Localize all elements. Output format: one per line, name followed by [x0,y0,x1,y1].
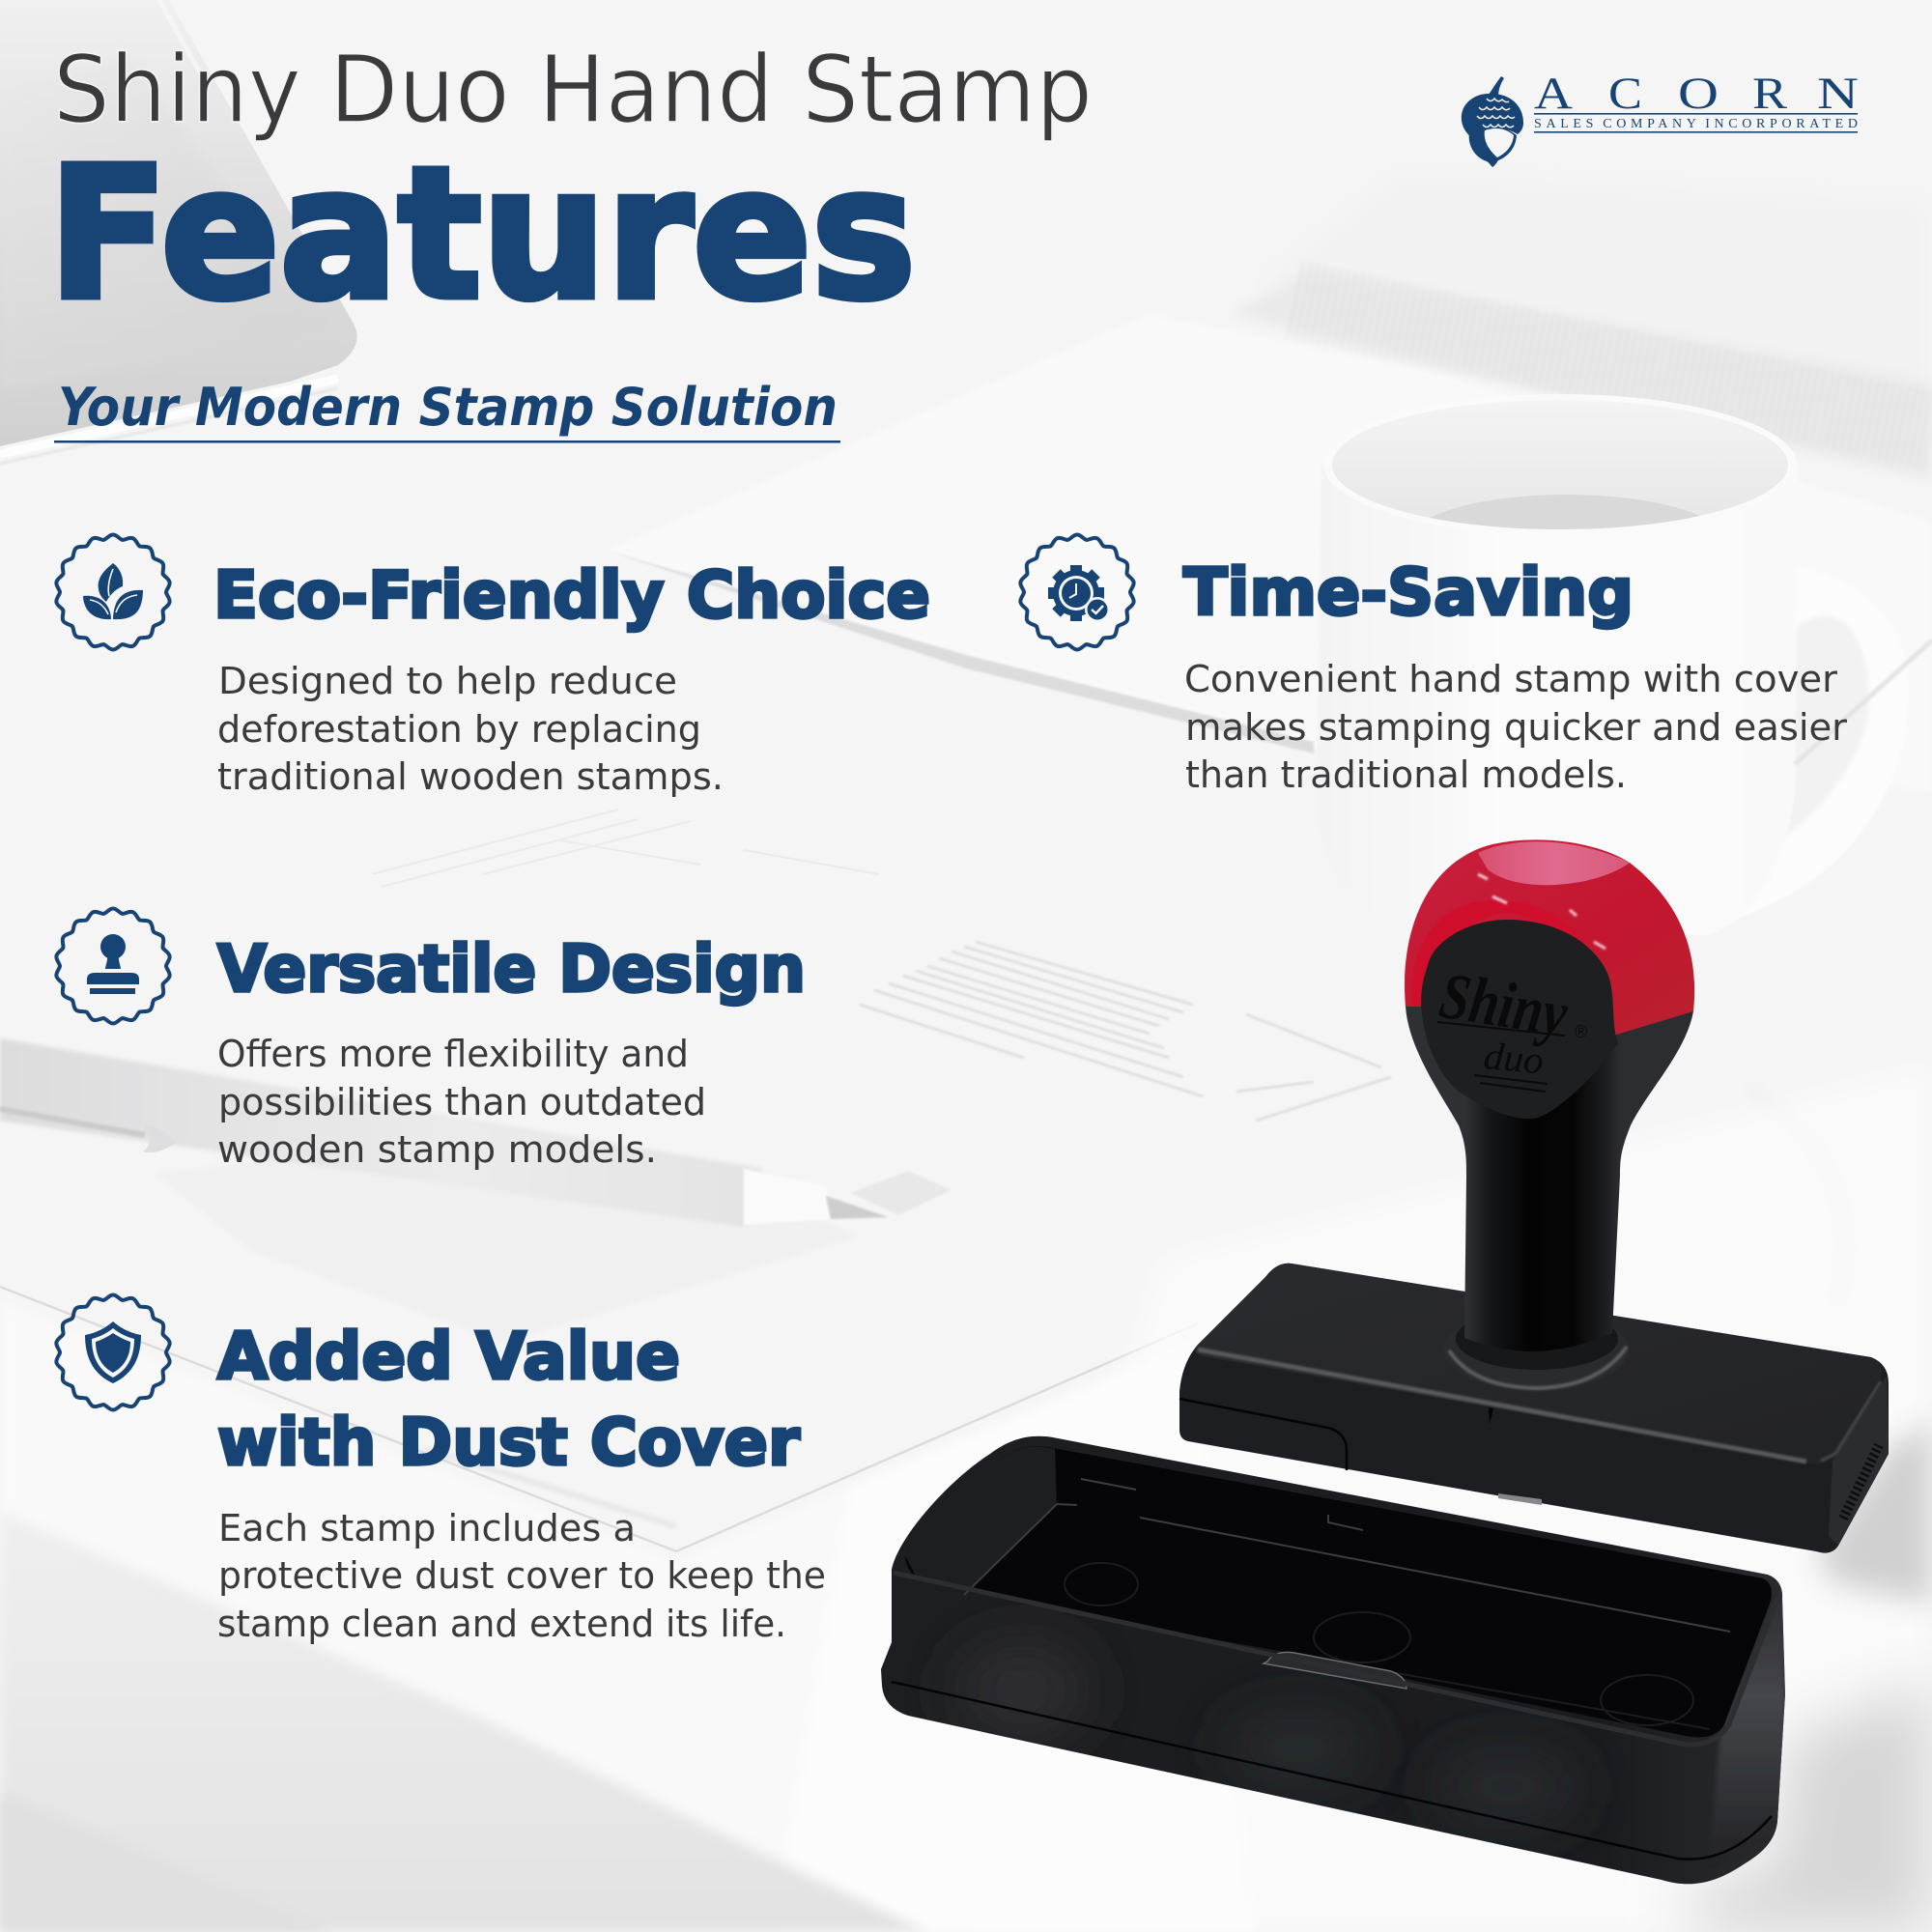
background: printed document lines [860,942,1391,1121]
cover wall shading [892,1584,1787,1864]
background: fuzzy notebook page edges [1231,270,1932,480]
body text: Convenient hand stamp with cover [1184,658,1837,701]
stamp head: red dome [1405,839,1694,1036]
background: paper stack shadow edge [607,551,1314,753]
background: darker band lower left [0,1792,338,1932]
background: embossed document text [372,810,879,887]
embossed model: duo: duo [1482,1034,1546,1082]
feature: Versatile Design [55,908,806,1172]
background: book block upper right [1256,174,1932,406]
body text: possibilities than outdated [218,1081,706,1124]
logo: Acorn Sales Company Incorporated [1462,69,1859,167]
product: stamp with red handle [1179,839,1889,1553]
body text [1184,658,1847,797]
body text: than traditional models. [1185,753,1627,797]
body text [217,1507,826,1646]
logo wordmark: ACORN: N [1817,69,1859,119]
background: document edge on desk [0,1287,1198,1551]
background: tablet corner [0,0,357,464]
feature: Added Value with Dust Cover [55,1294,826,1646]
body text: wooden stamp models. [217,1128,657,1172]
background: faint mug reflection [1748,1092,1845,1304]
background: pen [0,1038,952,1227]
body text: deforestation by replacing [217,708,701,752]
body text: stamp clean and extend its life. [217,1603,786,1646]
stamp stem [1406,966,1693,1351]
background: paper edge right of mug [1795,640,1932,764]
heading: Added Value [217,1319,680,1394]
stamp base [1179,1264,1889,1553]
cover inner left wall [905,1446,1057,1595]
icon: leaves badge [55,535,171,649]
cover clear window [1264,1652,1406,1689]
title: Shiny Duo Hand Stamp: Shiny Duo Hand Stamp [53,36,1093,144]
feature: Eco-Friendly Choice [55,535,930,799]
stamp collar [1443,1308,1629,1390]
background: white paper stack [607,314,1932,792]
product: dust cover [881,1436,1787,1884]
feature: Time-Saving [1019,535,1847,797]
cover inner details [964,1479,1730,1729]
body text: Designed to help reduce [218,660,677,703]
heading: Time-Saving [1183,554,1634,630]
embossed registered mark: ® [1575,1022,1587,1041]
body text: protective dust cover to keep the [218,1554,826,1598]
background: lighter desk surface [0,1299,1198,1932]
shadow: behind dust cover [1681,1681,1932,1932]
subtitle: Your Modern Stamp Solution: Your Modern Stamp Solution [58,377,838,438]
logo wordmark: ACORN [1534,69,1859,119]
stamp head: black cap with logo [1421,920,1618,1119]
body text [217,1033,706,1172]
logo wordmark: ACORN: O [1678,69,1719,119]
background: pale document grid patches [155,1130,860,1343]
cover rim highlight [894,1573,1777,1745]
icon: shield badge [55,1294,171,1410]
logo tagline: SALES COMPANY INCORPORATED [1534,117,1858,131]
body text: Offers more flexibility and [217,1033,689,1076]
icon: gear clock badge [1019,535,1135,649]
heading: with Dust Cover [217,1405,800,1480]
heading [217,1319,800,1480]
body text [217,660,724,799]
body text: traditional wooden stamps. [217,755,724,799]
body text: makes stamping quicker and easier [1185,706,1847,750]
icon: stamp badge [55,908,171,1024]
cover opening [905,1446,1772,1737]
cover outer body [881,1436,1785,1884]
heading: Features: Features [48,128,916,340]
logo wordmark: ACORN: R [1752,69,1788,119]
icon: acorn [1462,76,1523,167]
logo wordmark: ACORN: C [1608,69,1642,119]
shadow: behind stamp base [1816,1420,1932,1604]
background: table right side [966,1063,1932,1932]
heading: Versatile Design [217,931,806,1007]
body text: Each stamp includes a [218,1507,636,1550]
heading: Eco-Friendly Choice [213,557,930,633]
background: grey desk shadow lower left [0,1512,927,1932]
background: coffee mug [1332,394,1793,529]
embossed brand: Shiny: Shiny [1435,958,1574,1051]
logo wordmark: ACORN: A [1534,69,1573,119]
